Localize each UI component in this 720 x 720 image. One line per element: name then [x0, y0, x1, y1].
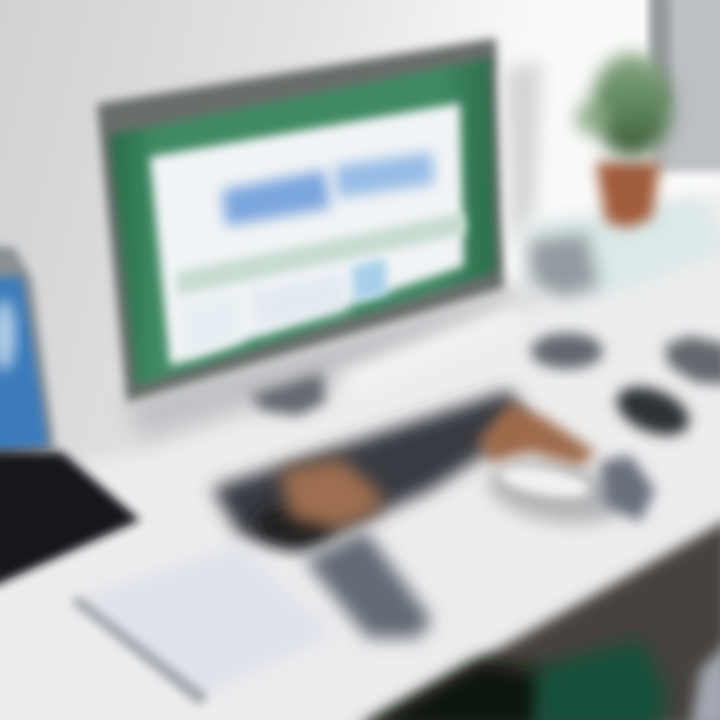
table cell: blue [352, 258, 388, 302]
plant pot [596, 162, 660, 228]
bottom right chair [355, 518, 720, 720]
plant foliage [576, 53, 672, 157]
monitor stand [250, 372, 326, 416]
notebook [70, 545, 335, 706]
left arm [255, 458, 432, 638]
monitor bezel [97, 38, 504, 402]
chair back [355, 518, 720, 720]
laptop [0, 245, 140, 588]
glass objects on rear desk [525, 195, 720, 300]
table cell: middle [250, 270, 348, 332]
chair black lower section [360, 660, 555, 720]
monitor [97, 38, 504, 416]
green accent [535, 640, 668, 720]
left hand shadow [255, 505, 335, 545]
accessory: dark mouse [610, 377, 696, 445]
laptop screen glare [0, 299, 16, 371]
right wall panel [650, 0, 720, 172]
mouse pad light [498, 461, 592, 503]
laptop base [0, 452, 140, 588]
monitor screen [150, 103, 464, 366]
desk surface [0, 185, 720, 720]
laptop screen [0, 276, 48, 452]
keyboard [212, 390, 530, 550]
vertical strip beside monitor [505, 60, 542, 250]
desk bright streak [340, 305, 530, 395]
left hand [280, 458, 382, 530]
spreadsheet title: left word [222, 170, 330, 226]
monitor shadow [125, 285, 540, 440]
light right corner [690, 640, 720, 720]
notebook spine [70, 596, 208, 706]
right hand [478, 402, 596, 466]
green table row [176, 212, 466, 296]
desk accessories [531, 333, 720, 445]
table cell: left [178, 292, 242, 358]
accessory: round puck [531, 333, 603, 369]
plant [576, 53, 672, 228]
laptop frame [0, 245, 55, 460]
mouse pad ring [483, 451, 627, 533]
right sleeve [600, 455, 655, 522]
right hand group [478, 402, 655, 533]
monitor green frame [110, 58, 496, 386]
notebook page [80, 545, 335, 695]
spreadsheet title: right word [335, 152, 434, 198]
left sleeve [305, 530, 432, 638]
accessory: right puck [665, 336, 720, 385]
